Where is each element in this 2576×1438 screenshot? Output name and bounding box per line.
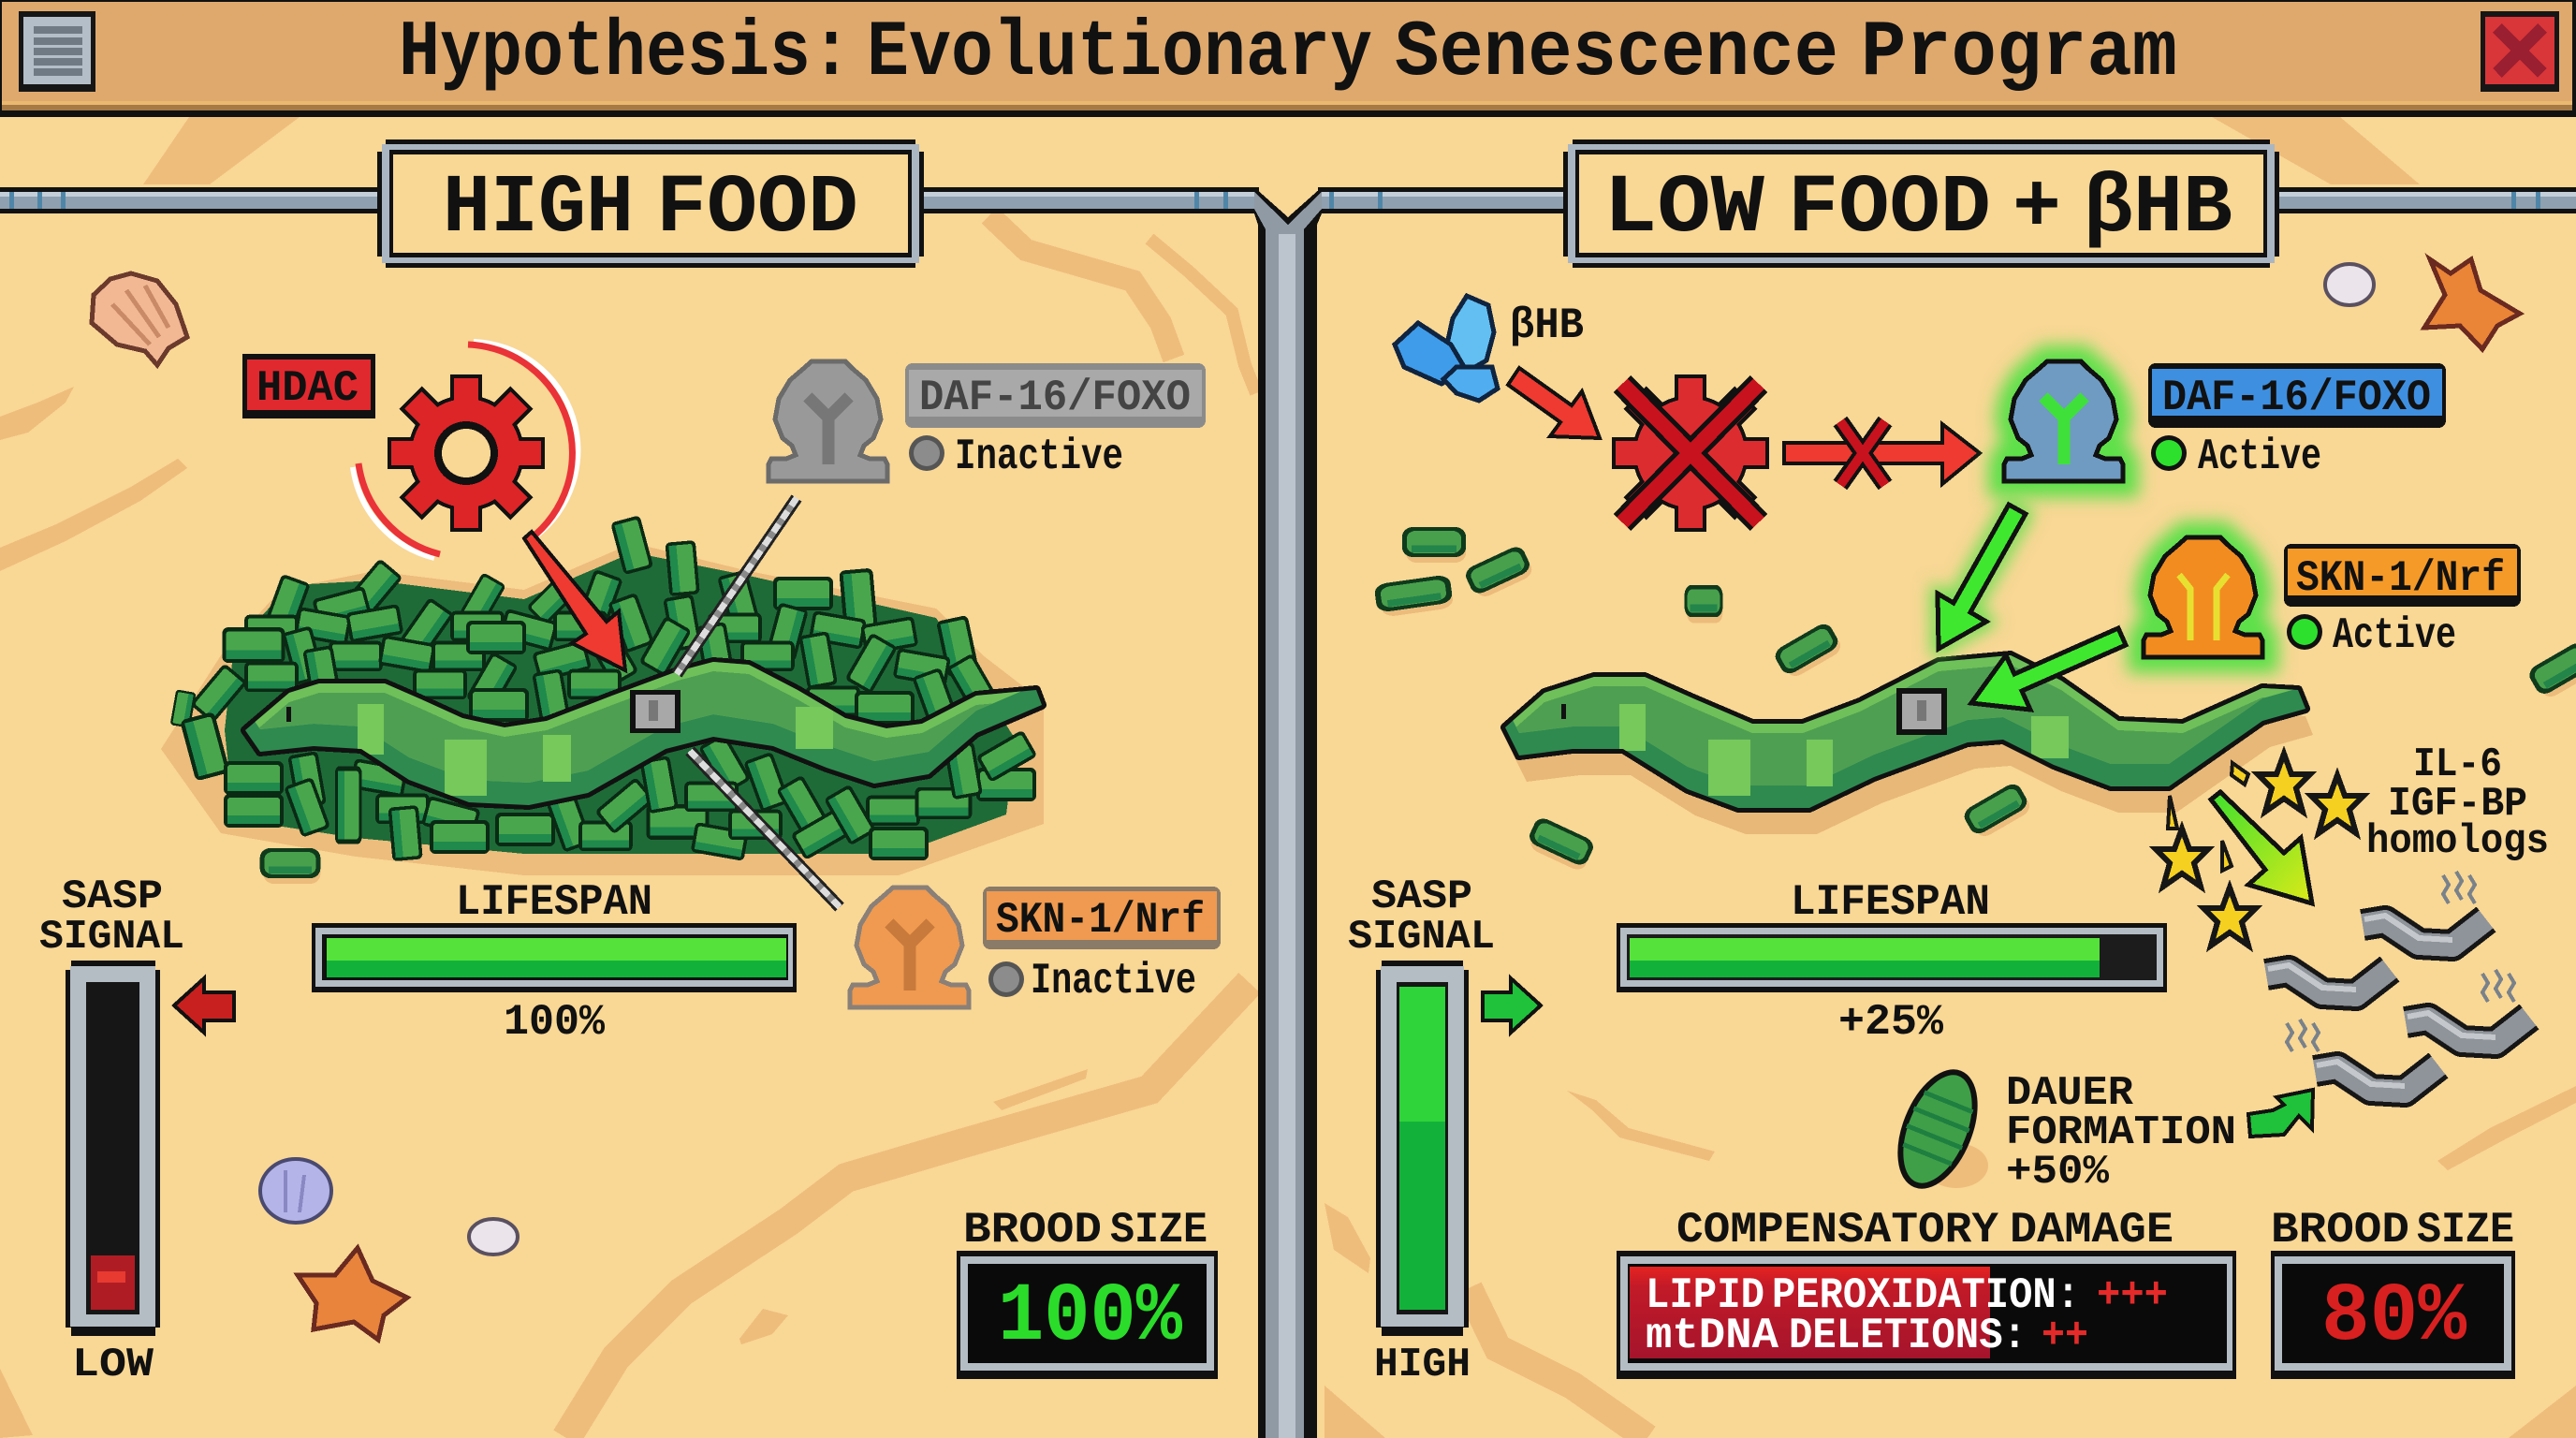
lifespan bar: 100% <box>312 878 797 1047</box>
label: SKN-1/Nrf active: Active <box>2333 611 2456 660</box>
bHB label: βHB <box>1510 301 1584 350</box>
label: SKN-1/Nrf inactive: SKN-1/Nrf <box>996 896 1205 945</box>
panel: low food plus bHB <box>1348 139 2576 1388</box>
icon: active SKN-1 protein <box>2144 537 2262 657</box>
scattered food pellets <box>1373 527 2576 873</box>
arrow: DAF-16 to worm <box>1938 505 2026 649</box>
heading: low food + bHB: + <box>2012 163 2061 256</box>
compensatory damage panel: +++ <box>2097 1271 2168 1320</box>
connector: worm to DAF-16 <box>677 498 797 674</box>
arrow: SASP low <box>174 978 234 1033</box>
arrow: dauer to worms <box>2248 1090 2313 1137</box>
label: SKN-1/Nrf active: SKN-1/Nrf <box>2296 554 2505 603</box>
brood size display: 100%: SIZE <box>1110 1206 1208 1255</box>
icon: close button <box>2481 11 2559 92</box>
brood size display: 80%: BROOD <box>2271 1206 2409 1255</box>
compensatory damage panel: PEROXIDATION: <box>1772 1271 2080 1320</box>
compensatory damage panel: mtDNA <box>1646 1312 1778 1360</box>
SASP signal meter: high: HIGH <box>1374 1342 1471 1388</box>
lifespan bar: 100%: LIFESPAN <box>456 878 652 927</box>
SASP signal meter: high <box>1348 873 1541 1388</box>
title text: Hypothesis: <box>399 9 852 98</box>
compensatory damage panel: DAMAGE <box>2010 1206 2174 1255</box>
label: SKN-1/Nrf inactive <box>983 887 1221 1005</box>
icon: peach shell <box>92 273 187 365</box>
icon: inhibited gear <box>1616 378 1765 528</box>
implant marker <box>1896 688 1947 735</box>
worm: low food <box>1488 646 2331 834</box>
label: dauer formation +50%: FORMATION <box>2006 1109 2236 1156</box>
SASP signal meter: low <box>39 873 234 1388</box>
heading: low food + bHB <box>1563 139 2279 268</box>
lifespan bar: +25%: LIFESPAN <box>1791 878 1990 927</box>
brood size display: 80%: SIZE <box>2417 1206 2514 1255</box>
label: SKN-1/Nrf inactive: Inactive <box>1031 957 1196 1005</box>
arrow: bHB to HDAC <box>1508 368 1600 438</box>
arrow: to secreted signals <box>2211 792 2312 903</box>
arrow: SASP high <box>1483 978 1541 1033</box>
heading: high food: HIGH <box>443 163 634 256</box>
heading: low food + bHB: LOW <box>1603 163 1764 256</box>
label: IL-6 and IGF-BP homologs: IL-6 <box>2413 741 2502 788</box>
icon: inactive SKN-1 protein <box>850 888 969 1007</box>
icon: orange starfish <box>2424 259 2520 349</box>
arrow: SKN-1 to worm <box>1971 628 2126 710</box>
arrow: blocked inhibition <box>1784 421 1980 485</box>
label: DAF-16/FOXO inactive: Inactive <box>955 433 1123 481</box>
lifespan bar: +25% <box>1617 878 2167 1047</box>
brood size display: 100%: 100% <box>998 1271 1182 1364</box>
title bar <box>0 0 2576 117</box>
SASP signal meter: low: SIGNAL <box>39 914 184 961</box>
label: DAF-16/FOXO active: Active <box>2198 433 2321 481</box>
label: IL-6 and IGF-BP homologs: IGF-BP <box>2388 781 2527 828</box>
brood size display: 80%: 80% <box>2321 1271 2466 1364</box>
label: HDAC: HDAC <box>256 364 359 413</box>
SASP signal meter: low: LOW <box>72 1342 154 1388</box>
SASP factors stars <box>2156 754 2364 946</box>
heading: low food + bHB: FOOD <box>1788 163 1991 256</box>
icon: bHB crystal <box>1395 296 1498 401</box>
label: DAF-16/FOXO active <box>2148 363 2446 481</box>
label: dauer formation +50%: +50% <box>2006 1149 2110 1196</box>
compensatory damage panel: LIPID <box>1646 1271 1764 1320</box>
icon: inactive DAF-16 protein <box>768 361 887 481</box>
label: dauer formation +50%: DAUER <box>2006 1070 2134 1117</box>
brood size display: 100%: BROOD <box>963 1206 1102 1255</box>
implant marker <box>630 690 681 733</box>
label: IL-6 and IGF-BP homologs <box>2366 741 2549 865</box>
worm: high food <box>241 657 1046 810</box>
icon: active DAF-16 protein <box>2004 361 2123 481</box>
compensatory damage panel <box>1617 1206 2236 1379</box>
heading: high food: FOOD <box>656 163 858 256</box>
food pile <box>161 515 1044 884</box>
SASP signal meter: high: SASP <box>1371 873 1472 920</box>
icon: white pebble <box>2325 264 2374 305</box>
label: SKN-1/Nrf active <box>2284 544 2521 660</box>
label: HDAC <box>242 354 375 418</box>
compensatory damage panel: COMPENSATORY <box>1676 1206 1998 1255</box>
SASP signal meter: low: SASP <box>62 873 163 920</box>
lifespan bar: 100%: 100% <box>504 998 605 1047</box>
compensatory damage panel: ++ <box>2042 1312 2088 1360</box>
label: DAF-16/FOXO inactive <box>905 363 1206 481</box>
icon: purple shell <box>260 1159 331 1223</box>
label: DAF-16/FOXO inactive: DAF-16/FOXO <box>919 374 1191 422</box>
title text: Program <box>1861 9 2177 98</box>
heading: low food + bHB: βHB <box>2084 163 2232 256</box>
connector: worm to SKN-1 <box>690 751 840 907</box>
icon: menu button <box>19 11 95 92</box>
lifespan bar: +25%: +25% <box>1838 998 1943 1047</box>
icon: starfish <box>298 1248 407 1340</box>
label: dauer formation +50% <box>2006 1070 2236 1196</box>
arrow: HDAC to worm <box>524 532 625 670</box>
compensatory damage panel: DELETIONS: <box>1789 1312 2027 1360</box>
heading: high food <box>377 139 924 268</box>
brood size display: 100% <box>957 1206 1218 1379</box>
title text <box>399 9 2177 98</box>
title text: Evolutionary <box>867 9 1372 98</box>
panel: high food <box>39 139 1221 1388</box>
icon: dauer pod <box>1886 1062 1989 1196</box>
icon: active HDAC gear <box>353 342 578 558</box>
title text: Senescence <box>1395 9 1838 98</box>
label: DAF-16/FOXO active: DAF-16/FOXO <box>2162 374 2431 422</box>
icon: white pebble <box>469 1219 518 1255</box>
brood size display: 80% <box>2271 1206 2515 1379</box>
label: IL-6 and IGF-BP homologs: homologs <box>2366 818 2549 865</box>
SASP signal meter: high: SIGNAL <box>1348 914 1495 961</box>
grey senescent worms <box>2266 872 2529 1092</box>
